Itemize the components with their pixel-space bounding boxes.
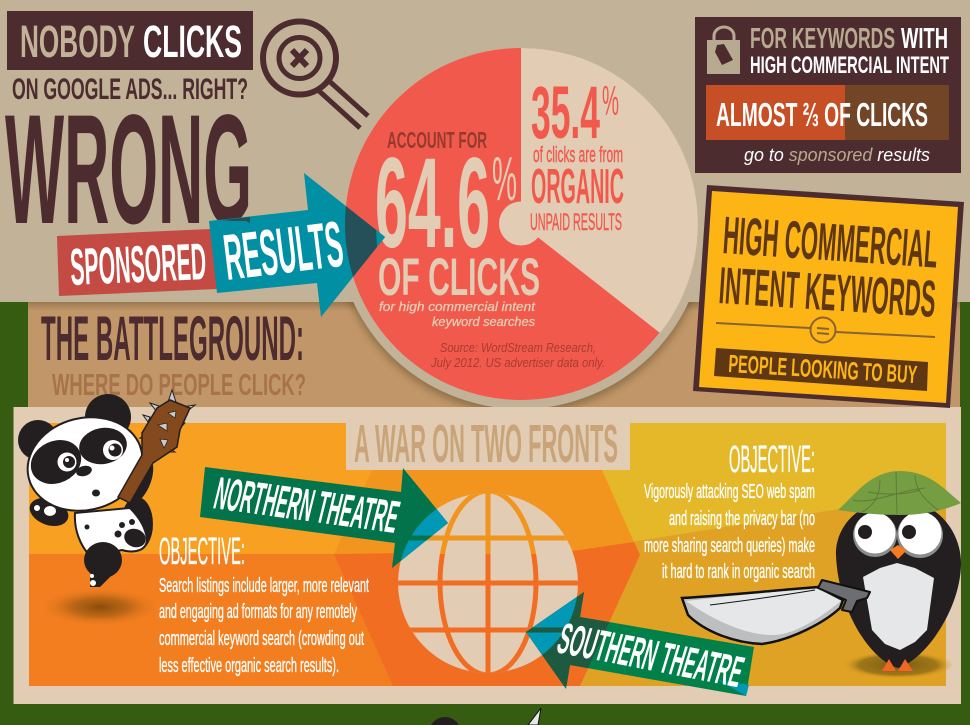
arrow: northern theatre [200,467,450,568]
icon: globe [396,490,580,680]
panel: keywords with high commercial intent [695,17,961,173]
icon: shopping bag with tag [707,27,740,74]
text: OBJECTIVE: [729,439,815,481]
pie source note [430,341,605,370]
pie label: organic share: % [602,77,619,124]
subheading: on google ads: ON GOOGLE ADS... RIGHT? [12,73,248,106]
text: NORTHERN THEATRE [210,467,404,543]
pie source note: July 2012. US advertiser data only. [430,356,605,370]
next section teaser: panda head [429,717,461,725]
pie label: sponsored share: ACCOUNT FOR [387,127,487,153]
text: ORGANIC [531,160,624,214]
text: where do people click: WHERE DO PEOPLE CLICK? [52,367,306,402]
pie label: organic share: 35.4 [531,71,600,154]
text: left objective: OBJECTIVE: [159,531,245,573]
background: green ground [0,302,970,725]
panel: a war on two fronts background [14,407,961,704]
background: battleground strip [28,302,960,407]
pie label: organic share: of clicks are from [533,142,623,167]
helmet [838,471,961,515]
text: right objective: more sharing search queries) make [644,535,815,557]
heading: nobody clicks [7,11,253,70]
pie label: sponsored share: 64.6 [375,132,490,275]
background: top band [0,0,970,302]
banner: sponsored [57,229,217,297]
arrow: southern theatre [526,592,754,697]
illustration: penguin with helmet and machete [682,471,961,679]
arrow: results: RESULTS [220,207,347,294]
text: left objective: Search listings include larger, more relevant [159,575,369,597]
text: right objective: it hard to rank in organic search [662,561,815,583]
pie source note: Source: WordStream Research, [440,341,596,355]
text: left objective: less effective organic search results). [159,655,339,677]
text: THE BATTLEGROUND: [41,304,304,374]
arrow: results [209,173,385,317]
heading: nobody clicks: CLICKS [143,16,242,67]
pie chart: sponsored vs organic clicks [310,0,730,414]
pie label: sponsored share [375,127,540,329]
machete [682,580,870,644]
pie label: sponsored share: OF CLICKS [378,248,540,307]
panel: high commercial intent keywords [693,185,964,408]
text: left objective: and engaging ad formats for any remotely [159,601,357,623]
text: WRONG [5,83,252,257]
pie label: sponsored share: keyword searches [432,315,535,329]
heading: nobody clicks: NOBODY [20,16,135,67]
icon: magnifying glass with x [263,22,368,128]
next section teaser: blade tip [528,708,541,725]
pie label: sponsored share: % [492,145,517,214]
pie label: organic share [530,71,624,236]
pie label: sponsored share: for high commercial intent [379,300,536,314]
club with spikes [118,390,195,503]
text: left objective: commercial keyword search (crowding out [159,628,364,650]
panel: keywords with high commercial intent: go to sponsored results [744,145,930,165]
text: SPONSORED [69,233,207,297]
text: right objective: and raising the privacy bar (no [669,508,815,530]
text: left objective [159,531,369,677]
text: right objective [644,439,815,583]
illustration: panda with spiked club [18,390,195,627]
text: right objective: Vigorously attacking SEO web spam [644,481,815,503]
text: UNPAID RESULTS [530,209,622,236]
